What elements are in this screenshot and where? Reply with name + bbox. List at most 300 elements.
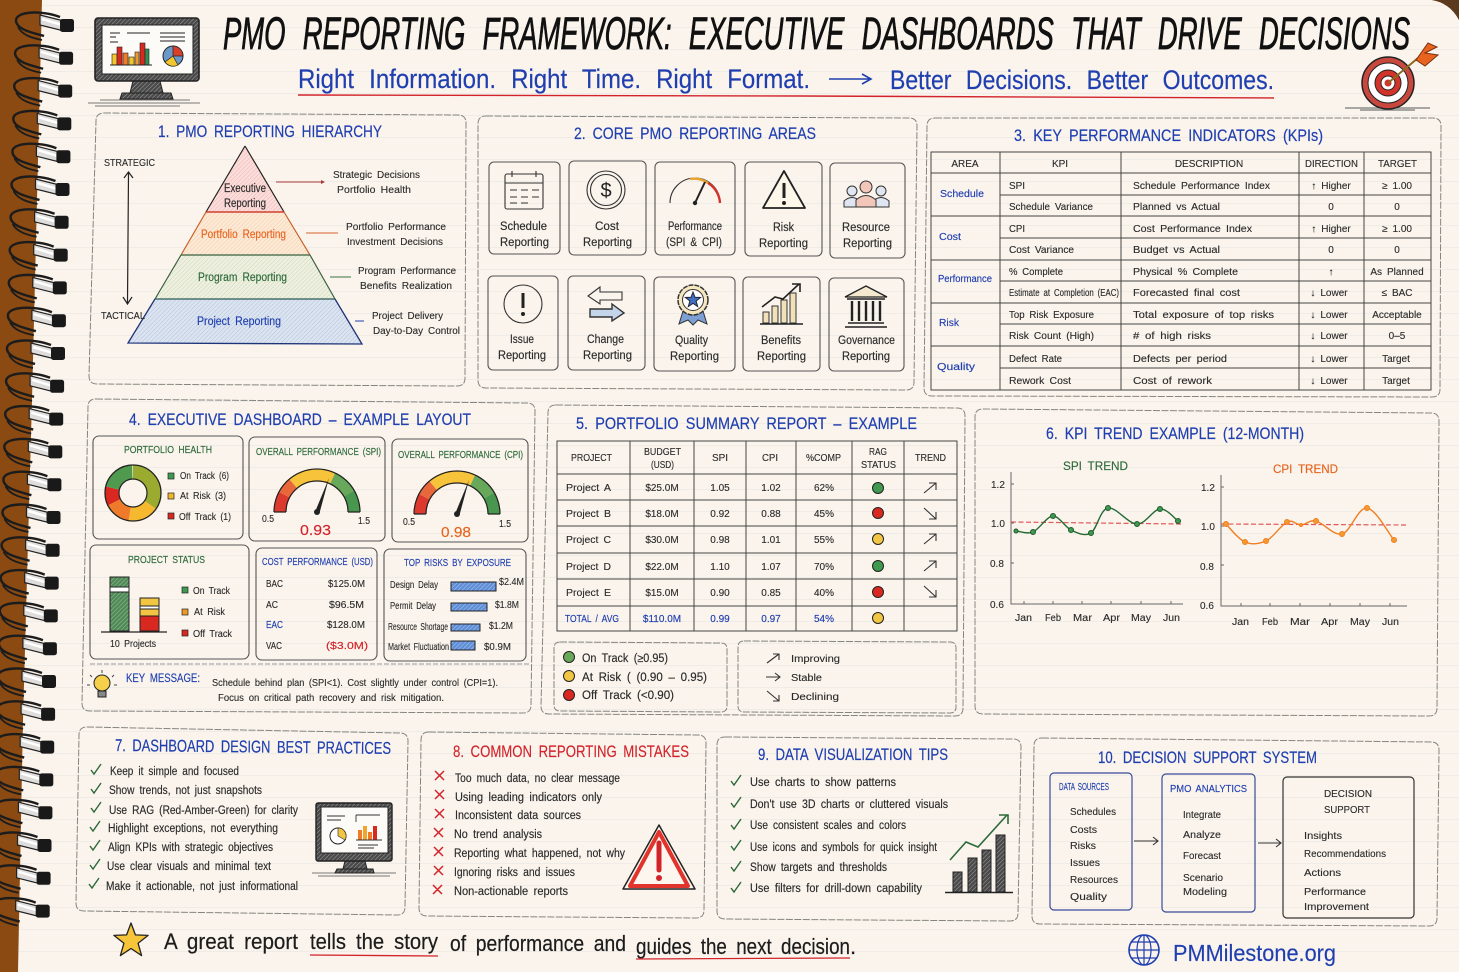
chart: CPI trend: 0.8	[1200, 562, 1214, 573]
portfolio table: 0.98	[710, 535, 730, 546]
card: change	[568, 276, 645, 370]
portfolio table: 0.92	[710, 509, 730, 520]
KPI table	[931, 152, 1431, 390]
card: cost: Reporting	[583, 237, 632, 249]
box: PMO analytics: Modeling	[1183, 887, 1227, 898]
icon: monitor	[312, 803, 396, 876]
card: resource: Resource	[842, 222, 890, 234]
tile: portfolio health: On Track (6)	[180, 471, 229, 482]
key message: Focus on critical path recovery and risk mitigation.	[218, 693, 444, 704]
portfolio table: 0.85	[761, 588, 781, 599]
card: issue	[488, 276, 558, 370]
card: benefits: Reporting	[757, 351, 806, 363]
tile: SPI gauge: 1.5	[358, 516, 370, 527]
tile: SPI gauge: 0.93	[300, 522, 331, 539]
trend legend	[738, 641, 956, 713]
box: PMO analytics: Analyze	[1183, 830, 1221, 841]
decision callouts: Project Delivery	[372, 311, 443, 322]
card: quality: Reporting	[670, 351, 719, 363]
KPI table: Cost Variance	[1009, 245, 1074, 256]
icon: dashboard monitor	[88, 18, 200, 106]
portfolio table: Project C	[566, 535, 611, 546]
chart: CPI trend: Mar	[1290, 617, 1311, 628]
KPI table: ↓ Lower	[1310, 354, 1348, 365]
KPI table: DIRECTION	[1305, 159, 1358, 170]
KPI table: Risk	[939, 318, 960, 329]
portfolio table: 55%	[814, 535, 834, 546]
tile: project status: 10 Projects	[110, 639, 156, 650]
tile: top risks	[384, 549, 526, 661]
icon: target with arrow	[1345, 43, 1438, 110]
spiral binding	[0, 12, 74, 926]
tile: top risks: Design Delay	[390, 580, 438, 591]
decision callouts: Day-to-Day Control	[373, 326, 460, 337]
card: change: Change	[587, 334, 624, 346]
mistakes list: Non-actionable reports	[454, 886, 568, 898]
portfolio table: TREND	[915, 453, 946, 464]
tile: cost performance: $128.0M	[327, 620, 365, 631]
chart: CPI trend: 0.6	[1200, 601, 1214, 612]
closing quote: A great report	[164, 929, 298, 954]
tile: SPI gauge	[249, 437, 385, 549]
checklist: Show trends, not just snapshots	[109, 785, 262, 797]
portfolio table: (USD)	[651, 460, 674, 471]
card: cost: $	[600, 180, 612, 202]
tile: top risks: $1.2M	[489, 621, 513, 632]
chart: CPI trend	[1200, 464, 1407, 628]
chart: SPI trend: 0.8	[990, 559, 1004, 570]
tile: cost performance: COST PERFORMANCE (USD)	[262, 557, 373, 568]
box: data sources: Risks	[1070, 841, 1096, 852]
tile: cost performance: EAC	[266, 620, 283, 631]
card: risk: Reporting	[759, 238, 808, 250]
KPI table: ↓ Lower	[1310, 331, 1348, 342]
card: risk: Risk	[773, 222, 794, 234]
portfolio table: $110.0M	[643, 614, 681, 625]
KPI table: 0	[1328, 245, 1334, 256]
KPI table: As Planned	[1370, 267, 1424, 278]
icon: star	[114, 923, 148, 956]
tile: CPI gauge	[392, 439, 528, 551]
tile: CPI gauge: 0.5	[403, 517, 415, 528]
card: schedule: Schedule	[500, 221, 547, 233]
tile: project status: Off Track	[193, 629, 233, 640]
card: governance: Reporting	[842, 351, 890, 363]
RAG legend	[554, 642, 727, 712]
tips list: Show targets and thresholds	[750, 862, 887, 874]
tile: portfolio health: Off Track (1)	[179, 512, 231, 523]
card: schedule	[489, 162, 560, 254]
mistakes list	[433, 771, 625, 898]
pyramid diagram: Portfolio Reporting	[201, 229, 286, 241]
portfolio table: %COMP	[806, 453, 841, 464]
trend legend: Declining	[791, 692, 839, 703]
KPI table: Quality	[937, 362, 975, 373]
portfolio table: Project E	[566, 588, 611, 599]
heading: 1. PMO REPORTING HIERARCHY	[158, 122, 382, 141]
box: decision support: Actions	[1304, 868, 1341, 879]
KPI table: ↓ Lower	[1310, 310, 1348, 321]
card: change: Reporting	[583, 350, 632, 362]
panel: 7 design best practices	[76, 727, 408, 915]
chart: SPI trend	[990, 461, 1183, 624]
portfolio table: STATUS	[861, 460, 896, 471]
closing quote	[164, 929, 856, 959]
heading: 7. DASHBOARD DESIGN BEST PRACTICES	[115, 736, 391, 758]
box: decision support: Performance	[1304, 887, 1366, 898]
tile: cost performance: $96.5M	[329, 600, 364, 611]
tile: cost performance	[256, 548, 377, 660]
portfolio table: Project A	[566, 483, 611, 494]
box: data sources: Quality	[1070, 892, 1107, 903]
subtitle: Right Information. Right Time. Right Format.	[298, 64, 810, 94]
box: decision support: SUPPORT	[1324, 805, 1370, 816]
chart: SPI trend: Apr	[1103, 613, 1121, 624]
portfolio table: 70%	[814, 562, 834, 573]
heading: 10. DECISION SUPPORT SYSTEM	[1098, 748, 1317, 767]
portfolio table: $30.0M	[645, 535, 679, 546]
KPI table: ≤ BAC	[1381, 288, 1413, 299]
portfolio table: $15.0M	[645, 588, 679, 599]
card: governance	[829, 278, 904, 371]
tile: top risks: $0.9M	[484, 642, 511, 653]
card: performance: Performance	[668, 221, 722, 233]
checklist: Use RAG (Red-Amber-Green) for clarity	[109, 805, 298, 817]
KPI table: CPI	[1009, 224, 1025, 235]
closing quote: guides the next decision	[636, 934, 850, 959]
portfolio table: Project B	[566, 509, 611, 520]
website: PMMilestone.org	[1173, 940, 1336, 966]
tile: cost performance: $125.0M	[328, 579, 365, 590]
card: schedule: Reporting	[500, 237, 549, 249]
panel: 2 core reporting areas	[478, 116, 917, 390]
KPI table: Target	[1382, 354, 1410, 365]
KPI table: 0	[1328, 202, 1334, 213]
KPI table: Schedule Performance Index	[1133, 181, 1270, 192]
card: issue: Reporting	[498, 350, 546, 362]
KPI table: Rework Cost	[1009, 376, 1071, 387]
tips list: Don't use 3D charts or cluttered visuals	[750, 799, 948, 811]
box: decision support: Insights	[1304, 831, 1342, 842]
tips list: Use filters for drill-down capability	[750, 883, 922, 895]
panel: 1 reporting hierarchy	[89, 113, 466, 386]
pyramid diagram: Program Reporting	[198, 272, 287, 284]
card: quality: Quality	[675, 335, 708, 347]
trend legend: Stable	[791, 673, 822, 684]
RAG legend: Off Track (<0.90)	[582, 690, 674, 702]
box: data sources: Resources	[1070, 875, 1118, 886]
chart: SPI trend: 1.0	[991, 519, 1005, 530]
chart: SPI trend: Mar	[1073, 613, 1093, 624]
chart: SPI trend: May	[1131, 613, 1151, 624]
portfolio table: 1.05	[710, 483, 730, 494]
closing quote: of performance and	[450, 931, 626, 956]
decision callouts: Portfolio Performance	[346, 222, 446, 233]
tile: top risks: Resource Shortage	[388, 622, 448, 633]
card: issue: Issue	[510, 334, 534, 346]
portfolio table: 45%	[814, 509, 834, 520]
box: PMO analytics	[1162, 774, 1255, 912]
KPI table: Total exposure of top risks	[1133, 310, 1274, 321]
portfolio table: TOTAL / AVG	[565, 614, 619, 625]
subtitle: Better Decisions. Better Outcomes.	[890, 65, 1274, 95]
card: risk	[745, 162, 822, 256]
card: resource	[830, 163, 905, 258]
decision callouts: Portfolio Health	[337, 185, 411, 196]
panel: 4 executive dashboard	[82, 399, 535, 713]
portfolio table: CPI	[762, 453, 778, 464]
mistakes list: Reporting what happened, not why	[454, 848, 625, 860]
trend legend: Improving	[791, 654, 840, 665]
heading: 8. COMMON REPORTING MISTAKES	[453, 742, 689, 761]
box: PMO analytics: PMO ANALYTICS	[1170, 784, 1247, 795]
chart: CPI trend: 1.2	[1201, 483, 1215, 494]
KPI table: Top Risk Exposure	[1009, 310, 1094, 321]
KPI table: 0–5	[1389, 331, 1406, 342]
tile: cost performance: VAC	[266, 641, 282, 652]
tips list: Use consistent scales and colors	[750, 820, 906, 832]
decision callouts: Strategic Decisions	[333, 170, 420, 181]
tile: cost performance: AC	[266, 600, 278, 611]
pyramid diagram: Reporting	[224, 198, 266, 210]
pyramid diagram	[128, 146, 362, 344]
portfolio table: 62%	[814, 483, 834, 494]
panel: 5 portfolio summary	[541, 405, 965, 716]
chart: SPI trend: SPI TREND	[1063, 461, 1128, 473]
box: data sources	[1050, 773, 1132, 910]
box: data sources: Costs	[1070, 825, 1097, 836]
key message	[90, 664, 530, 704]
tile: project status	[90, 545, 249, 659]
tile: project status: On Track	[193, 586, 231, 597]
chart: CPI trend: Feb	[1262, 617, 1278, 628]
tile: top risks: $1.8M	[495, 600, 519, 611]
KPI table: ≥ 1.00	[1382, 224, 1412, 235]
chart: SPI trend: 0.6	[990, 600, 1004, 611]
mistakes list: Too much data, no clear message	[455, 773, 620, 785]
tile: project status: PROJECT STATUS	[128, 555, 205, 566]
KPI table: KPI	[1052, 159, 1068, 170]
KPI table: DESCRIPTION	[1175, 159, 1243, 170]
KPI table: AREA	[951, 159, 979, 170]
portfolio table: 0.99	[710, 614, 730, 625]
icon: rising bar chart	[945, 815, 1013, 892]
KPI table: Forecasted final cost	[1133, 288, 1240, 299]
tile: portfolio health: PORTFOLIO HEALTH	[124, 445, 212, 456]
portfolio table	[557, 441, 957, 631]
decision callouts: Program Performance	[358, 266, 456, 277]
tile: top risks: Permit Delay	[390, 601, 436, 612]
arrow	[1258, 839, 1281, 847]
box: data sources: DATA SOURCES	[1059, 782, 1109, 793]
KPI table: Cost	[939, 232, 961, 243]
portfolio table: BUDGET	[644, 447, 681, 458]
portfolio table: SPI	[712, 453, 728, 464]
checklist: Highlight exceptions, not everything	[108, 823, 278, 835]
heading: 2. CORE PMO REPORTING AREAS	[574, 124, 816, 143]
card: benefits: Benefits	[761, 335, 801, 347]
portfolio table: $22.0M	[645, 562, 679, 573]
KPI table: Defects per period	[1133, 354, 1227, 365]
card: performance: (SPI & CPI)	[666, 237, 722, 249]
panel: 9 data visualization tips	[717, 737, 1021, 921]
mistakes list: Using leading indicators only	[455, 792, 602, 804]
tile: SPI gauge: OVERALL PERFORMANCE (SPI)	[256, 447, 381, 458]
KPI table: Acceptable	[1372, 310, 1422, 321]
box: decision support: DECISION	[1324, 789, 1372, 800]
card: quality	[654, 277, 735, 371]
card: cost	[569, 161, 646, 255]
mistakes list: Inconsistent data sources	[455, 810, 581, 822]
RAG legend: On Track (≥0.95)	[582, 653, 668, 665]
KPI table: ↓ Lower	[1310, 376, 1348, 387]
box: data sources: Schedules	[1070, 807, 1116, 818]
checklist: Make it actionable, not just informational	[106, 881, 298, 893]
KPI table: Risk Count (High)	[1009, 331, 1094, 342]
portfolio table: RAG	[869, 447, 887, 458]
decision callouts	[276, 170, 460, 337]
tile: top risks: Market Fluctuation	[388, 642, 449, 653]
icon: warning triangle	[623, 825, 695, 889]
portfolio table: 1.07	[761, 562, 781, 573]
tips list	[731, 775, 948, 895]
box: PMO analytics: Integrate	[1183, 810, 1221, 821]
card: cost: Cost	[595, 221, 620, 233]
portfolio table: 0.88	[761, 509, 781, 520]
website	[1129, 935, 1336, 966]
key message: KEY MESSAGE:	[126, 673, 200, 685]
portfolio table: Project D	[566, 562, 611, 573]
box: PMO analytics: Scenario	[1183, 873, 1223, 884]
tile: SPI gauge: 0.5	[262, 514, 274, 525]
checklist	[89, 764, 298, 893]
chart: CPI trend: Apr	[1321, 617, 1339, 628]
box: data sources: Issues	[1070, 858, 1100, 869]
tips list: Use icons and symbols for quick insight	[750, 842, 938, 854]
box: decision support: Recommendations	[1304, 849, 1386, 860]
tile: portfolio health	[93, 436, 243, 539]
tile: top risks: TOP RISKS BY EXPOSURE	[404, 558, 511, 569]
heading: 3. KEY PERFORMANCE INDICATORS (KPIs)	[1014, 126, 1323, 145]
card: performance	[655, 162, 735, 255]
portfolio table: PROJECT	[571, 453, 612, 464]
chart: CPI trend: Jan	[1232, 617, 1249, 628]
chart: CPI trend: Jun	[1382, 617, 1399, 628]
closing quote: .	[850, 934, 856, 959]
tips list: Use charts to show patterns	[750, 777, 896, 789]
tile: portfolio health: At Risk (3)	[180, 491, 226, 502]
tile: cost performance: BAC	[266, 579, 283, 590]
checklist: Align KPIs with strategic objectives	[108, 842, 273, 854]
pyramid diagram: Executive	[224, 183, 266, 195]
KPI table: Target	[1382, 376, 1410, 387]
heading: 5. PORTFOLIO SUMMARY REPORT – EXAMPLE	[576, 414, 917, 433]
KPI table: Schedule Variance	[1009, 202, 1093, 213]
portfolio table: 1.10	[710, 562, 730, 573]
box: decision support: Improvement	[1304, 902, 1369, 913]
mistakes list: Ignoring risks and issues	[454, 867, 575, 879]
RAG legend: At Risk ( (0.90 – 0.95)	[582, 672, 707, 684]
subtitle	[298, 64, 1274, 98]
panel: 10 decision support	[1032, 738, 1439, 926]
KPI table: Performance	[938, 274, 992, 285]
portfolio table: 0.97	[761, 614, 781, 625]
portfolio table: 0.90	[710, 588, 730, 599]
chart: SPI trend: Jan	[1015, 613, 1032, 624]
key message: Schedule behind plan (SPI<1). Cost slightly under control (CPI=1).	[212, 678, 498, 689]
tile: project status: At Risk	[194, 607, 226, 618]
chart: CPI trend: CPI TREND	[1273, 464, 1338, 476]
tile: CPI gauge: OVERALL PERFORMANCE (CPI)	[398, 450, 523, 461]
chart: CPI trend: May	[1350, 617, 1370, 628]
portfolio table: 1.01	[761, 535, 781, 546]
heading: 6. KPI TREND EXAMPLE (12-MONTH)	[1046, 424, 1304, 443]
portfolio table: 40%	[814, 588, 834, 599]
card: resource: Reporting	[843, 238, 892, 250]
panel: 3 KPIs	[924, 118, 1441, 397]
KPI table: ↑ Higher	[1311, 181, 1351, 192]
strategic to tactical axis: STRATEGIC	[104, 158, 155, 169]
KPI table: Schedule	[940, 189, 984, 200]
box: PMO analytics: Forecast	[1183, 851, 1221, 862]
box: decision support	[1283, 777, 1414, 918]
decision callouts: Investment Decisions	[347, 237, 443, 248]
card: benefits	[743, 277, 820, 371]
KPI table: ↓ Lower	[1310, 288, 1348, 299]
strategic to tactical axis	[101, 158, 155, 322]
chart: SPI trend: Feb	[1045, 613, 1061, 624]
icon: light bulb	[87, 670, 117, 697]
chart: SPI trend: Jun	[1163, 613, 1180, 624]
KPI table: 0	[1394, 245, 1400, 256]
KPI table: Cost Performance Index	[1133, 224, 1252, 235]
heading: 9. DATA VISUALIZATION TIPS	[758, 745, 948, 764]
KPI table: TARGET	[1378, 159, 1417, 170]
KPI table: Defect Rate	[1009, 354, 1062, 365]
chart: SPI trend: 1.2	[991, 480, 1005, 491]
arrow	[1134, 837, 1158, 845]
tile: CPI gauge: 0.98	[441, 524, 471, 541]
portfolio table: $18.0M	[645, 509, 679, 520]
portfolio table: 1.02	[761, 483, 781, 494]
KPI table: Cost of rework	[1133, 376, 1213, 387]
pyramid diagram: Project Reporting	[197, 316, 281, 328]
tile: top risks: $2.4M	[499, 577, 524, 588]
mistakes list: No trend analysis	[454, 829, 542, 841]
portfolio table: $25.0M	[645, 483, 679, 494]
card: governance: Governance	[838, 335, 895, 347]
panel: 8 reporting mistakes	[419, 732, 706, 918]
KPI table: SPI	[1009, 181, 1025, 192]
portfolio table: 54%	[814, 614, 834, 625]
tile: CPI gauge: 1.5	[499, 519, 511, 530]
tile: cost performance: ($3.0M)	[326, 641, 368, 652]
chart: CPI trend: 1.0	[1201, 522, 1215, 533]
strategic to tactical axis: TACTICAL	[101, 311, 145, 322]
heading: 4. EXECUTIVE DASHBOARD – EXAMPLE LAYOUT	[129, 410, 471, 429]
KPI table: ≥ 1.00	[1382, 181, 1412, 192]
KPI table: Budget vs Actual	[1133, 245, 1220, 256]
KPI table: Estimate at Completion (EAC)	[1009, 288, 1119, 299]
KPI table: ↑	[1328, 267, 1334, 278]
panel: 6 KPI trend	[975, 409, 1439, 716]
decision callouts: Benefits Realization	[360, 281, 452, 292]
KPI table: Physical % Complete	[1133, 267, 1238, 278]
KPI table: ↑ Higher	[1311, 224, 1351, 235]
KPI table: 0	[1394, 202, 1400, 213]
checklist: Use clear visuals and minimal text	[107, 861, 272, 873]
KPI table: % Complete	[1009, 267, 1063, 278]
